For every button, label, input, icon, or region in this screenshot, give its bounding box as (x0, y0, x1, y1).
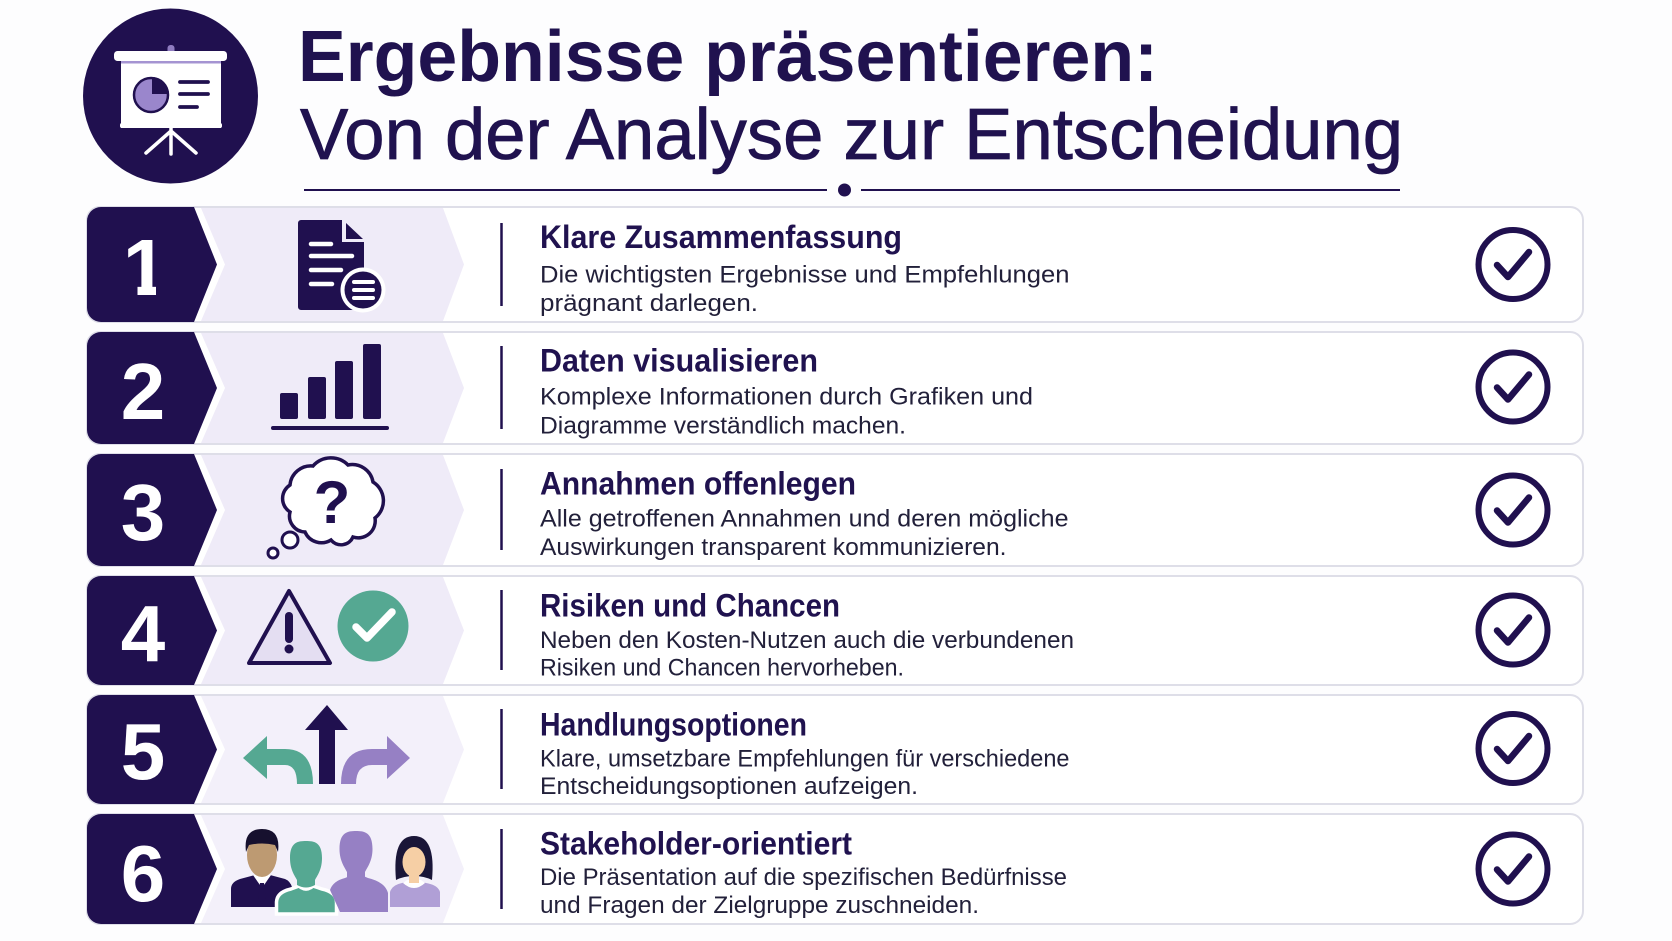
row 6: Stakeholder-orientiert (87, 814, 1583, 924)
icon: three direction arrows (243, 705, 410, 784)
row 1: Klare Zusammenfassung: Die wichtigsten Ergebnisse und Empfehlungen (540, 262, 1070, 288)
row 5: Handlungsoptionen: Klare, umsetzbare Empfehlungen für verschiedene (540, 746, 1070, 772)
row 2: Daten visualisieren: Daten visualisieren (540, 342, 818, 378)
row 4: Risiken und Chancen: Risiken und Chancen (540, 588, 840, 624)
row 6: Stakeholder-orientiert: und Fragen der Zielgruppe zuschneiden. (540, 892, 979, 919)
header icon: presentation screen (83, 8, 258, 184)
row 1: Klare Zusammenfassung: 1 (123, 223, 167, 312)
title: Von der Analyse zur Entscheidung (300, 95, 1403, 175)
row 2: Daten visualisieren: Diagramme verständlich machen. (540, 412, 906, 440)
row 6: Stakeholder-orientiert: 6 (121, 829, 165, 918)
row 4: Risiken und Chancen: Risiken und Chancen hervorheben. (540, 654, 904, 682)
row 2: Daten visualisieren: Komplexe Informationen durch Grafiken und (540, 384, 1033, 410)
row 3: Annahmen offenlegen: Auswirkungen transparent kommunizieren. (540, 534, 1006, 561)
icon: stakeholder group (231, 829, 440, 914)
row 4: Risiken und Chancen (87, 576, 1583, 685)
status check (1478, 352, 1548, 422)
icon: thought cloud with question mark: ? (314, 469, 350, 536)
icon: document (298, 220, 386, 312)
status check (1478, 596, 1548, 664)
row 4: Risiken und Chancen: Neben den Kosten-Nutzen auch die verbundenen (540, 627, 1074, 654)
row 6: Stakeholder-orientiert: Die Präsentation auf die spezifischen Bedürfnisse (540, 864, 1067, 891)
row 4: Risiken und Chancen: 4 (121, 589, 166, 678)
title: Ergebnisse präsentieren: (298, 17, 1158, 97)
status check (1478, 476, 1548, 544)
icon: bar chart (273, 344, 387, 428)
row 1: Klare Zusammenfassung (87, 207, 1583, 322)
row 3: Annahmen offenlegen: Annahmen offenlegen (540, 466, 856, 502)
status check (1478, 834, 1548, 904)
title (298, 17, 1403, 175)
row 2: Daten visualisieren (87, 332, 1583, 444)
row 5: Handlungsoptionen: Handlungsoptionen (540, 706, 807, 742)
row 2: Daten visualisieren: 2 (121, 347, 165, 436)
status check (1478, 714, 1548, 783)
status check (1478, 230, 1548, 299)
row 5: Handlungsoptionen: Entscheidungsoptionen aufzeigen. (540, 773, 918, 800)
row 6: Stakeholder-orientiert: Stakeholder-orientiert (540, 826, 852, 862)
row 1: Klare Zusammenfassung: prägnant darlegen. (540, 290, 758, 317)
row 3: Annahmen offenlegen: Alle getroffenen Annahmen und deren mögliche (540, 506, 1068, 532)
row 5: Handlungsoptionen: 5 (121, 707, 165, 796)
row 3: Annahmen offenlegen: 3 (121, 468, 165, 557)
row 1: Klare Zusammenfassung: Klare Zusammenfassung (540, 219, 902, 255)
row 5: Handlungsoptionen (87, 695, 1583, 804)
icon: warning triangle and green check (249, 590, 408, 663)
row 3: Annahmen offenlegen (87, 454, 1583, 566)
icon: thought cloud with question mark (268, 458, 383, 558)
